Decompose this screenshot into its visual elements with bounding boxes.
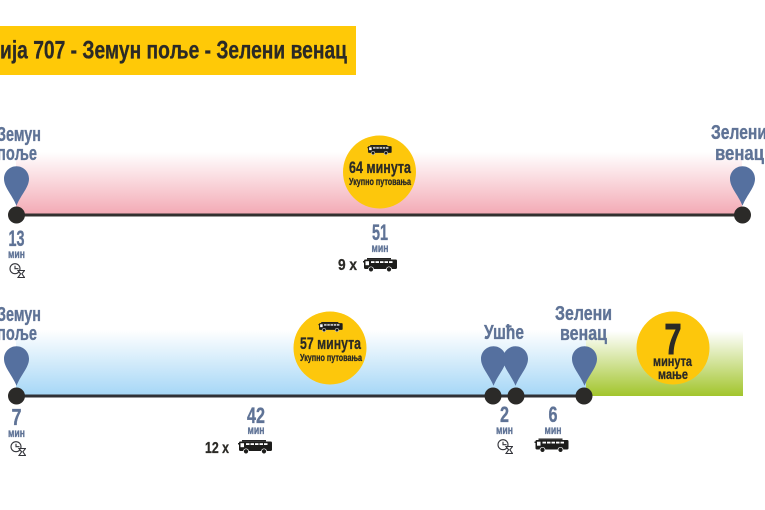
ride time: 6 мин, bus: 6 (548, 402, 558, 427)
pink gradient band (16, 152, 742, 215)
ride time: 42 мин, 12 x bus: 42 (247, 403, 265, 428)
ride time: 6 мин, bus: мин (544, 423, 562, 437)
stop: Земун поље (0, 124, 41, 206)
stop: Зелени венац: венац (560, 323, 608, 345)
ride time: 51 мин, 9 x bus: 51 (372, 220, 388, 245)
wait time: 7 мин: мин (8, 426, 25, 440)
wait time: 2 мин: мин (496, 423, 513, 437)
ride time: 42 мин, 12 x bus: мин (248, 423, 264, 437)
wait time: 13 мин: 13 (8, 226, 24, 251)
ride time: 51 мин, 9 x bus (338, 220, 397, 274)
ride time: 6 мин, bus (534, 402, 568, 452)
total time badge: 64 минута (343, 136, 416, 208)
title banner (0, 26, 356, 75)
stop: Зелени венац (711, 122, 765, 206)
wait time: 7 мин: 7 (12, 404, 22, 430)
route line (8, 388, 592, 404)
savings badge: 7 минута мање: мање (658, 366, 688, 382)
panel: new route, 57 minutes (0, 303, 743, 457)
total time badge: 57 минута: Укупно путовања (300, 353, 362, 364)
ride time: 51 мин, 9 x bus: 9 x (338, 257, 357, 274)
ride time: 42 мин, 12 x bus: 12 x (205, 440, 229, 457)
savings badge: 7 минута мање: минута (653, 353, 692, 369)
savings badge: 7 минута мање: 7 (664, 315, 682, 364)
ride time: 51 мин, 9 x bus: мин (372, 241, 388, 255)
stop: Ушће: Ушће (484, 322, 524, 344)
green gradient band (586, 331, 743, 396)
wait time: 2 мин (496, 402, 513, 454)
wait time: 2 мин: 2 (500, 402, 509, 427)
route line (8, 206, 751, 224)
title banner: ија 707 - Земун поље - Зелени венац (0, 36, 347, 64)
ride time: 42 мин, 12 x bus (205, 403, 272, 457)
wait time: 13 мин (8, 226, 25, 278)
total time badge: 57 минута: 57 минута (300, 334, 361, 353)
total time badge: 64 минута: Укупно путовања (349, 177, 411, 188)
stop: Зелени венац: Зелени (555, 303, 612, 325)
stop: Зелени венац (555, 303, 612, 386)
wait time: 7 мин (8, 404, 26, 456)
total time badge: 57 минута (294, 312, 366, 384)
blue gradient band (16, 330, 586, 395)
panel: current route, 64 minutes (0, 122, 765, 278)
wait time: 13 мин: мин (8, 247, 25, 261)
total time badge: 64 минута: 64 минута (349, 158, 411, 177)
savings badge: 7 минута мање (636, 312, 710, 384)
stop: Земун поље (0, 304, 41, 386)
stop: Ушће (481, 322, 528, 386)
